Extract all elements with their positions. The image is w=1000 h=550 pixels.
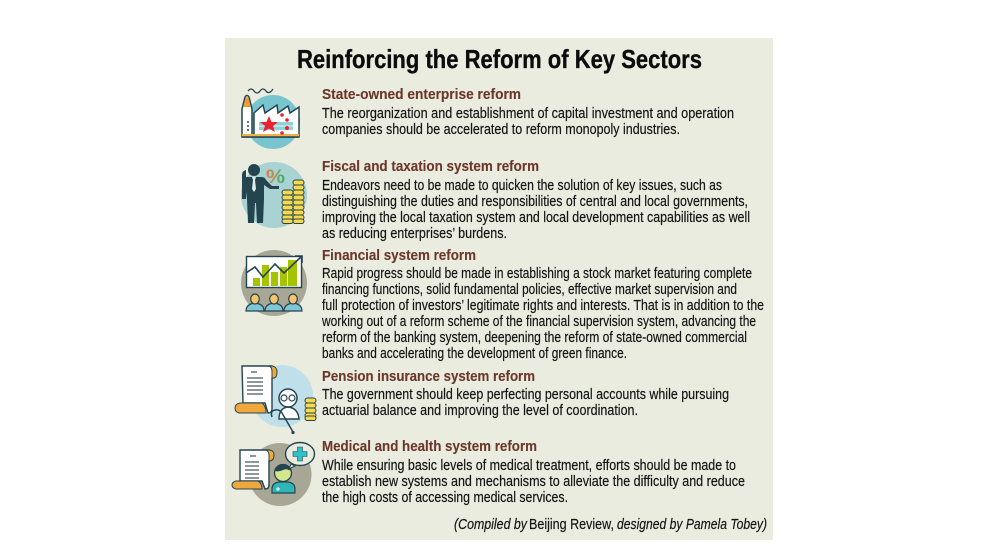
heading: medical and health system reform: Medical and health system reform bbox=[322, 439, 537, 455]
text: financial system body: financing functions, solid fundamental policies, effective market supervision and bbox=[322, 282, 737, 298]
icon: businessman with coins: % bbox=[266, 167, 285, 188]
text: financial system body: Rapid progress should be made in establishing a stock market featuring complete bbox=[322, 266, 752, 282]
panel: infographic background bbox=[225, 38, 773, 540]
credit line: (Compiled by bbox=[454, 517, 528, 533]
icon: businessman with coins bbox=[241, 162, 307, 228]
text: medical and health body: establish new systems and mechanisms to alleviate the difficulty and reduce bbox=[322, 474, 745, 490]
text: state-owned enterprise body: companies should be accelerated to reform monopoly industries. bbox=[322, 122, 680, 138]
credit line bbox=[454, 517, 767, 533]
text: pension insurance body: actuarial balance and improving the level of coordination. bbox=[322, 403, 638, 419]
text: state-owned enterprise body bbox=[322, 106, 734, 138]
text: financial system body: banks and accelerating the development of green finance. bbox=[322, 346, 627, 362]
icon: factory bbox=[242, 89, 300, 149]
text: medical and health body bbox=[322, 458, 745, 506]
text: fiscal and taxation body: as reducing enterprises’ burdens. bbox=[322, 226, 507, 242]
icon: medical scroll and doctor bbox=[232, 442, 314, 506]
heading: fiscal and taxation system reform: Fiscal and taxation system reform bbox=[322, 159, 539, 175]
heading: pension insurance system reform: Pension insurance system reform bbox=[322, 369, 535, 385]
credit line: designed by Pamela Tobey) bbox=[617, 517, 767, 533]
text: fiscal and taxation body: distinguishing the duties and responsibilities of central and local governments, bbox=[322, 194, 748, 210]
text: state-owned enterprise body: The reorganization and establishment of capital investment and operation bbox=[322, 106, 734, 122]
credit line: Beijing Review, bbox=[529, 517, 614, 533]
text: financial system body: full protection of investors’ legitimate rights and interests. That is in addition to the bbox=[322, 298, 764, 314]
text: fiscal and taxation body bbox=[322, 178, 750, 242]
text: fiscal and taxation body: improving the local taxation system and local development capabilities as well bbox=[322, 210, 750, 226]
icon: pension scroll and elder bbox=[235, 365, 316, 434]
text: medical and health body: While ensuring basic levels of medical treatment, efforts should be made to bbox=[322, 458, 736, 474]
text: financial system body bbox=[321, 266, 764, 362]
title: Reinforcing the Reform of Key Sectors bbox=[297, 44, 702, 74]
text: pension insurance body bbox=[322, 387, 729, 419]
text: financial system body: reform of the banking system, deepening the reform of state-owned commercial bbox=[322, 330, 747, 346]
text: financial system body: working out of a reform scheme of the financial supervision system, advancing the bbox=[321, 314, 756, 330]
icon: chart presentation bbox=[241, 250, 307, 316]
text: medical and health body: the high costs of accessing medical services. bbox=[322, 490, 568, 506]
heading: state-owned enterprise reform: State-owned enterprise reform bbox=[322, 87, 521, 103]
text: fiscal and taxation body: Endeavors need to be made to quicken the solution of key issues, such as bbox=[322, 178, 722, 194]
text: pension insurance body: The government should keep perfecting personal accounts while pursuing bbox=[322, 387, 729, 403]
heading: financial system reform: Financial system reform bbox=[322, 248, 476, 264]
